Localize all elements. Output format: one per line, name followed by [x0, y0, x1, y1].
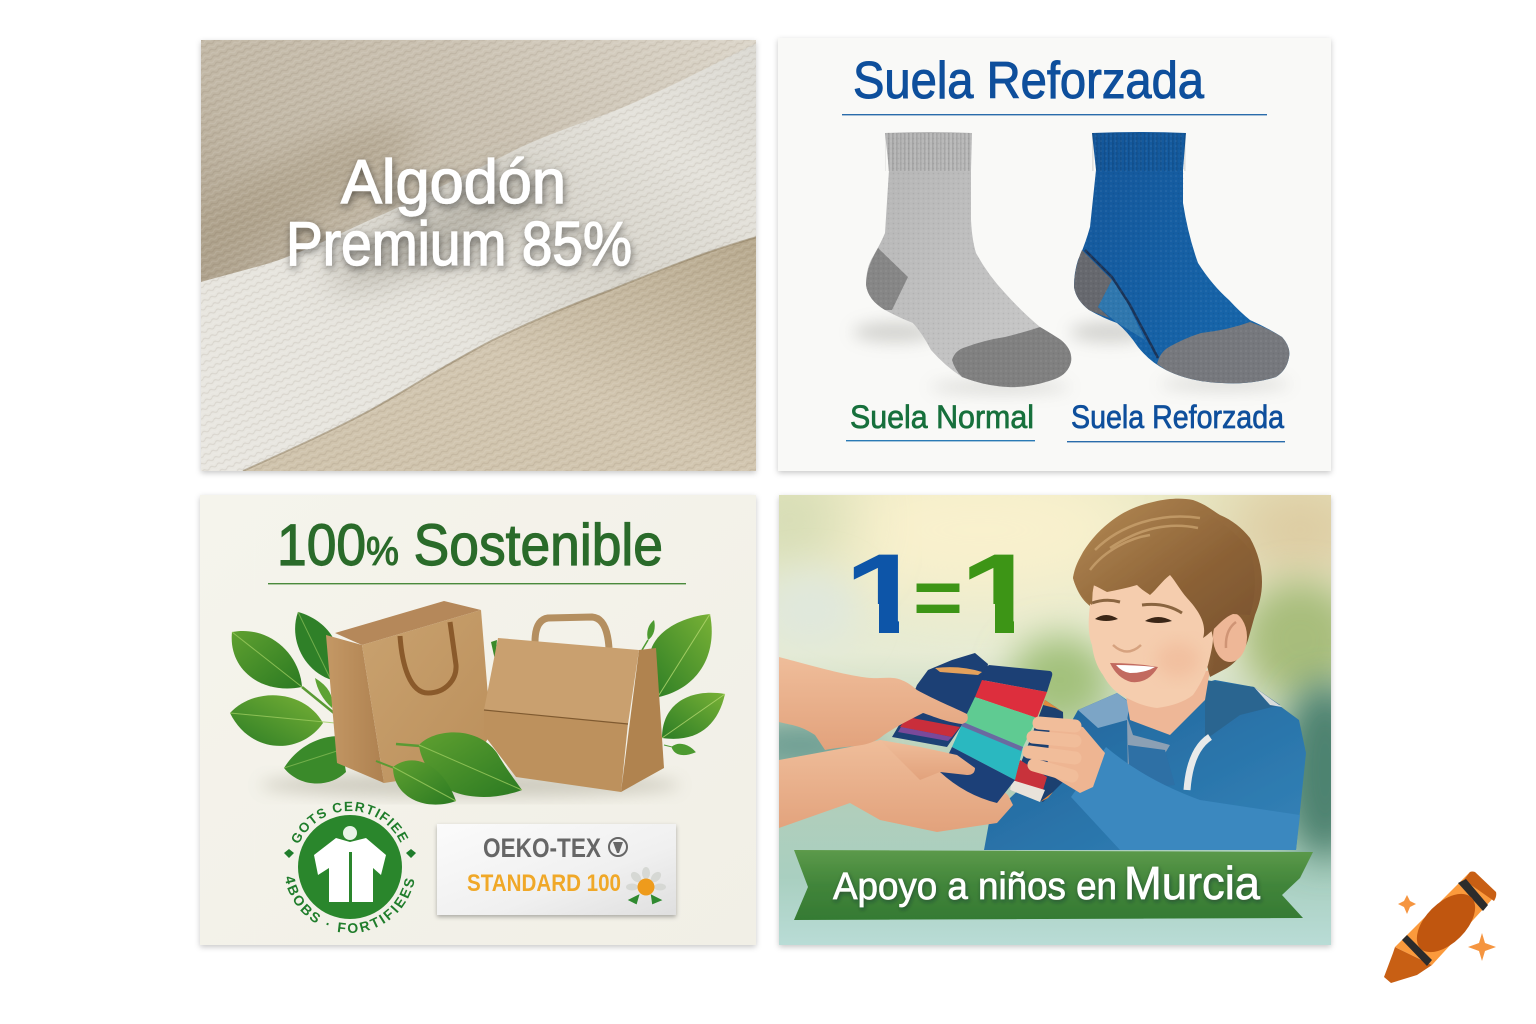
- t-shirt: [1127, 718, 1170, 764]
- fabric white fold shading under heading: [321, 161, 559, 303]
- boy's hand: [1029, 722, 1105, 793]
- back sock: [1010, 700, 1065, 802]
- badge: oeko-tex standard 100: OEKO-TEX: [483, 833, 601, 863]
- fabric white fold: [201, 43, 757, 471]
- heading: suela reforzada: Suela Reforzada: [853, 52, 1204, 110]
- badge: oeko-tex standard 100: [437, 824, 676, 915]
- badge: oeko-tex standard 100: STANDARD 100: [467, 870, 621, 897]
- hair fringe: [1073, 570, 1238, 638]
- infographic canvas: [197, 37, 1496, 983]
- registered mark icon: [609, 838, 627, 856]
- fabric lower beige fold: [243, 237, 757, 471]
- panel background: [200, 495, 756, 945]
- equals sign: =: [913, 553, 963, 641]
- heading: algodón premium: Premium 85%: [286, 210, 632, 279]
- ring ornaments: [284, 849, 416, 858]
- colourful socks: [892, 653, 1065, 803]
- hood collar right: [1205, 680, 1280, 740]
- ribbon text: [833, 857, 1260, 909]
- hood collar left: [1078, 693, 1130, 728]
- panel: suela reforzada: [778, 38, 1331, 471]
- shirt icon: [314, 826, 386, 902]
- ribbon text: Apoyo a niños en: [833, 866, 1117, 908]
- sock shadows: [853, 322, 1290, 392]
- blurred background: [776, 494, 1334, 950]
- icon: crayon logo: [1384, 872, 1496, 983]
- bag handle: [535, 617, 609, 648]
- boy: [984, 499, 1306, 850]
- fabric lower fold crease: [243, 237, 757, 471]
- daisy icon: [626, 867, 666, 903]
- ring text: GOTS CERTIFIEE: [292, 802, 408, 843]
- adult hand lower palm: [779, 740, 1013, 832]
- neck: [1125, 670, 1210, 735]
- panel: algodón premium fabric: [169, 40, 757, 471]
- fabric upper fold shading: [210, 118, 414, 244]
- ear: [1213, 612, 1247, 662]
- hair back: [1073, 499, 1262, 677]
- label: suela normal: Suela Normal: [850, 399, 1034, 435]
- smile: [1110, 663, 1158, 682]
- panel: 1=1 apoyo a niños: [776, 494, 1334, 950]
- front sock: [982, 665, 1052, 692]
- nose: [1113, 645, 1141, 652]
- fabric upper beige fold: [201, 40, 756, 471]
- number 1 blue: 1: [844, 529, 925, 657]
- right kraft bag: [484, 617, 664, 792]
- sleeve: [1071, 747, 1300, 850]
- hoodie: [984, 680, 1306, 850]
- panel: 100% sostenible: [197, 494, 759, 950]
- heading: algodón premium: [286, 148, 632, 279]
- number 1 green: 1: [959, 529, 1040, 657]
- left sock: [892, 653, 988, 747]
- leaves behind bags: [230, 612, 725, 784]
- bag handle: [400, 622, 456, 693]
- heading: 100% sostenible: 100% Sostenible: [277, 513, 663, 578]
- badge: gots certified: 4BOBS · FORTIFIEES: [286, 876, 414, 933]
- label: suela reforzada: Suela Reforzada: [1071, 399, 1284, 435]
- front leaves: [376, 732, 522, 805]
- sock: normal grey: [866, 132, 1071, 387]
- face: [1089, 570, 1213, 708]
- sock: reinforced blue: [1074, 132, 1289, 383]
- drawstring: [1187, 737, 1210, 790]
- ribbon: [794, 850, 1313, 920]
- panel background: [778, 38, 1331, 471]
- adult hand upper: [779, 657, 968, 750]
- icon: sparkles: [1398, 895, 1496, 961]
- eyes and brows: [1092, 600, 1182, 623]
- cheek blush: [1160, 645, 1196, 675]
- left kraft bag: [326, 601, 491, 783]
- ribbon text: Murcia: [1124, 857, 1260, 909]
- adult thumb lower: [880, 740, 975, 780]
- ground shadows: [260, 773, 680, 797]
- knit texture: [201, 40, 756, 471]
- badge: gots certified: [284, 802, 416, 933]
- heading: algodón premium: Algodón: [341, 148, 566, 217]
- hair strands: [1090, 517, 1200, 570]
